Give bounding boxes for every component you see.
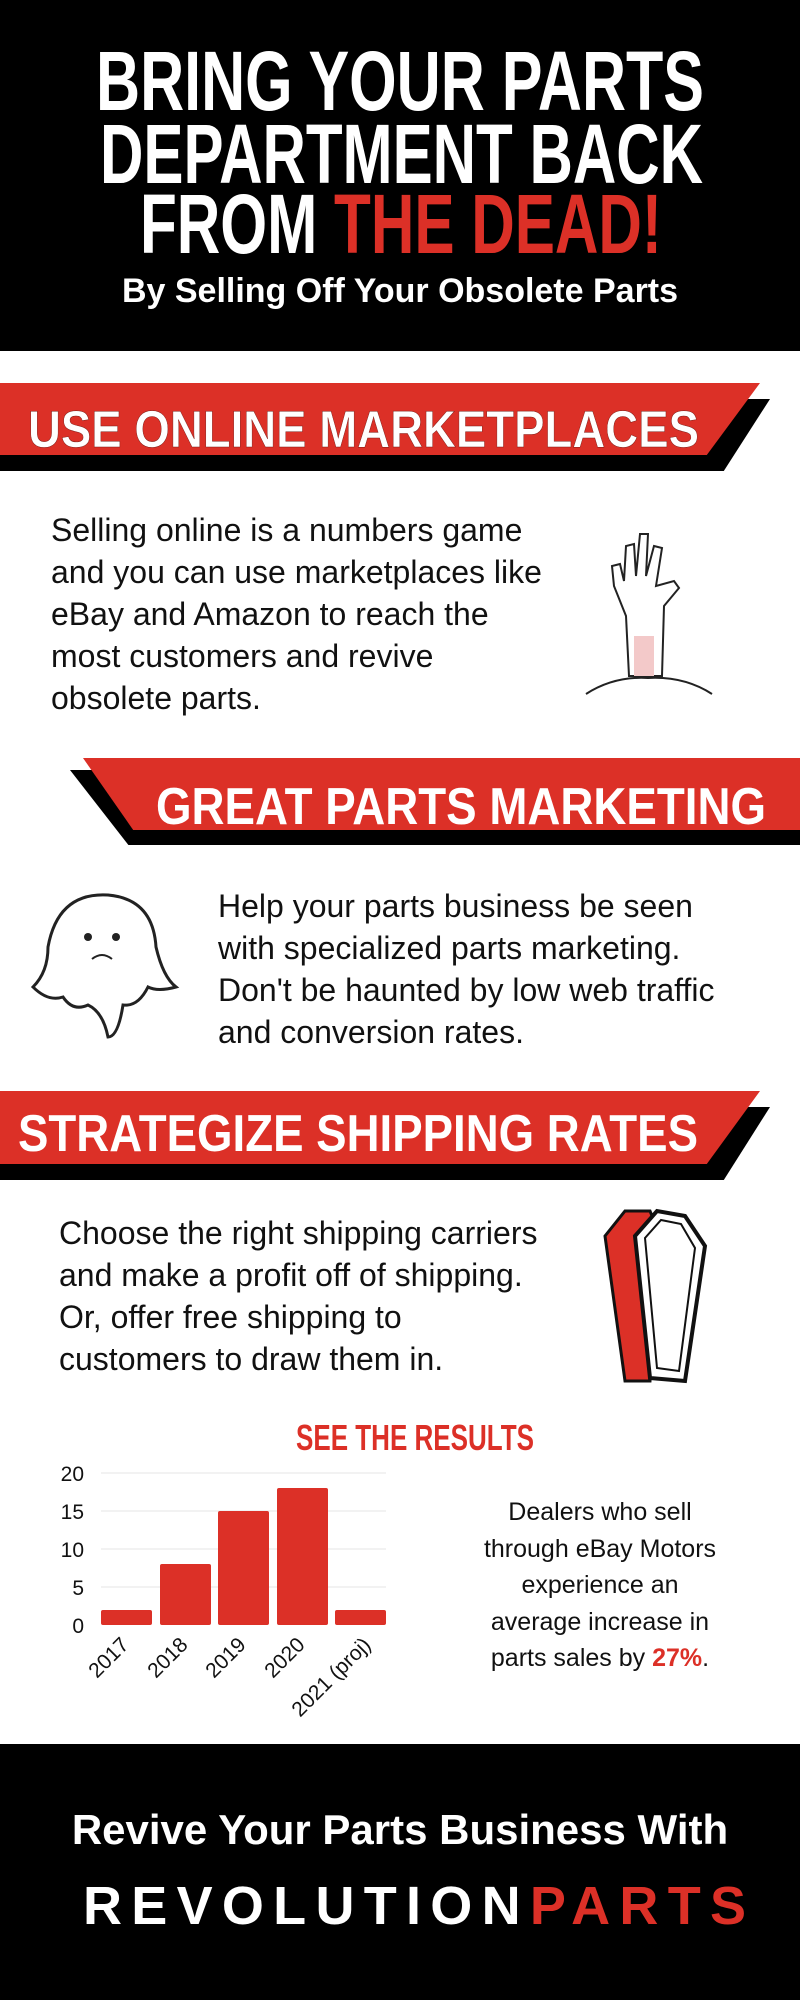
text: shipping: Or, offer free shipping to <box>59 1299 402 1335</box>
text: shipping: customers to draw them in. <box>59 1341 443 1377</box>
logo: revolution parts: REVOLUTIONPARTS <box>83 1876 746 1936</box>
banner: use online marketplaces: USE ONLINE MARKETPLACES <box>28 401 699 459</box>
callout: statistic: parts sales by 27%. <box>491 1644 709 1672</box>
banner: strategize shipping rates <box>0 1091 770 1180</box>
bar chart: 5 <box>72 1577 84 1600</box>
callout: statistic <box>484 1498 716 1672</box>
chart x labels <box>84 1636 376 1721</box>
text: shipping: Choose the right shipping carriers <box>59 1215 537 1251</box>
footer <box>0 1744 800 2000</box>
callout: statistic: average increase in <box>491 1608 709 1636</box>
text: parts marketing: and conversion rates. <box>218 1014 524 1050</box>
text: parts marketing: with specialized parts marketing. <box>218 930 680 966</box>
title: FROM THE DEAD! <box>140 177 662 270</box>
banner: use online marketplaces <box>0 383 770 471</box>
banner: great parts marketing <box>70 758 800 845</box>
bar chart: 15 <box>61 1501 84 1524</box>
callout: statistic: through eBay Motors <box>484 1534 716 1562</box>
header <box>0 0 800 351</box>
text: online marketplaces: eBay and Amazon to reach the <box>51 596 489 632</box>
text: shipping: and make a profit off of shipping. <box>59 1257 523 1293</box>
bar chart: 20 <box>61 1463 84 1486</box>
text: shipping <box>59 1215 537 1377</box>
text: parts marketing <box>218 888 714 1050</box>
bar chart: 0 <box>72 1615 84 1638</box>
bar chart <box>61 1463 386 1638</box>
text: online marketplaces <box>51 512 542 716</box>
callout: statistic: experience an <box>521 1571 679 1599</box>
bar chart: 10 <box>61 1539 84 1562</box>
subtitle: By Selling Off Your Obsolete Parts <box>122 272 678 310</box>
title <box>96 34 704 270</box>
icon: zombie hand <box>586 533 712 695</box>
text: online marketplaces: obsolete parts. <box>51 680 261 716</box>
text: parts marketing: Don't be haunted by low web traffic <box>218 972 714 1008</box>
callout: statistic: Dealers who sell <box>508 1498 692 1526</box>
text: online marketplaces: Selling online is a numbers game <box>51 512 522 548</box>
icon: coffin <box>603 1208 708 1384</box>
footer tagline: Revive Your Parts Business With <box>72 1806 728 1853</box>
text: online marketplaces: most customers and revive <box>51 638 433 674</box>
icon: ghost <box>31 893 180 1038</box>
text: parts marketing: Help your parts business be seen <box>218 888 693 924</box>
text: online marketplaces: and you can use marketplaces like <box>51 554 542 590</box>
banner: strategize shipping rates: STRATEGIZE SHIPPING RATES <box>18 1105 698 1163</box>
